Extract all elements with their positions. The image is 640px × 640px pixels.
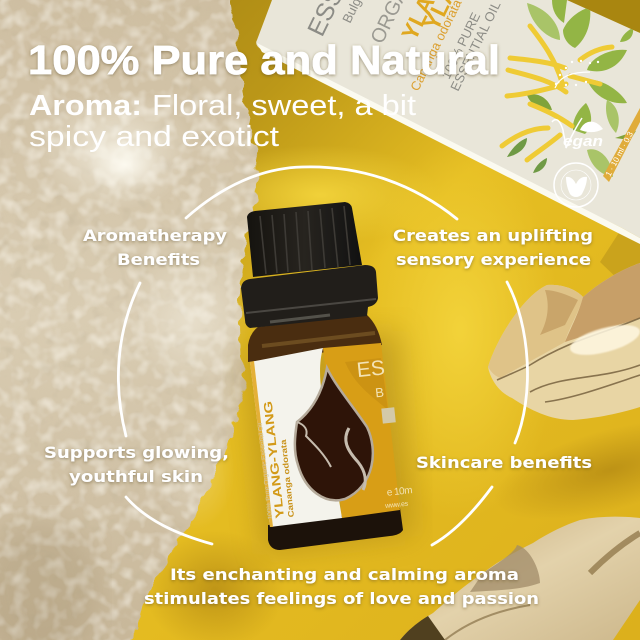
bottle base — [268, 508, 403, 550]
label: glowing skin: youthful skin — [69, 467, 203, 486]
aroma description: Floral, sweet, a bit — [152, 90, 416, 122]
box brand and product text: 100% PURE — [438, 10, 483, 81]
aroma description: Aroma: — [29, 90, 142, 122]
box volume strip: 1 · 10 ml · 0.3 — [604, 130, 635, 178]
fleece blanket — [0, 0, 257, 640]
glass shoulder — [248, 315, 382, 362]
label: aromatherapy benefits — [83, 226, 228, 269]
bottom seed pod — [400, 517, 640, 640]
badge: no animal testing — [554, 163, 598, 207]
certification badges — [552, 60, 603, 207]
label brand text: B — [375, 385, 385, 400]
white label — [250, 348, 342, 527]
label: glowing skin: Supports glowing, — [44, 443, 229, 462]
label: uplifting experience — [393, 226, 593, 269]
label: love and passion: Its enchanting and calming aroma — [170, 565, 519, 584]
label product name: YLANG-YLANG — [261, 400, 287, 519]
label brand text — [356, 355, 414, 511]
aroma description — [29, 90, 416, 153]
badge: vegan: egan — [563, 133, 603, 150]
label product name — [256, 399, 296, 520]
ribbed cap — [247, 202, 362, 277]
label: aromatherapy benefits: Benefits — [117, 250, 200, 269]
gold label — [323, 343, 400, 518]
label brand text: www.es — [384, 501, 409, 510]
box leaves and flower illustration — [502, 0, 636, 177]
label product name: Cananga odorata — [279, 439, 296, 518]
lower-left arc — [126, 497, 212, 544]
product box — [256, 0, 640, 244]
bottle shadow — [240, 330, 415, 556]
label brand text: ES — [356, 356, 386, 382]
title: 100% Pure and Natural — [28, 37, 500, 83]
label brand text: e 10m — [386, 485, 413, 499]
right seed pod — [488, 263, 640, 420]
label product name: 100% Pure Organic Essential Oil — [258, 423, 274, 520]
box brand and product text — [302, 0, 504, 93]
drop emblem — [295, 368, 373, 500]
box volume strip — [603, 108, 640, 182]
label: uplifting experience: sensory experience — [396, 250, 591, 269]
collar — [241, 265, 378, 328]
top arc — [186, 167, 457, 219]
essential oil bottle — [240, 202, 415, 556]
lower-right arc — [432, 487, 492, 545]
label: glowing skin — [44, 443, 229, 486]
badge: stars arc — [555, 60, 599, 88]
label: skincare benefits: Skincare benefits — [416, 453, 592, 472]
right arc — [507, 282, 527, 443]
label: aromatherapy benefits: Aromatherapy — [83, 226, 228, 245]
left arc — [118, 283, 140, 436]
badge: vegan — [552, 118, 603, 150]
circular arc segments — [118, 167, 527, 545]
box brand and product text: ESSENTIAL OIL — [447, 0, 504, 93]
label: uplifting experience: Creates an uplifting — [393, 226, 593, 245]
aroma description: spicy and exotict — [29, 121, 279, 153]
label: love and passion: stimulates feelings of love and passion — [144, 589, 539, 608]
label: love and passion — [144, 565, 539, 608]
